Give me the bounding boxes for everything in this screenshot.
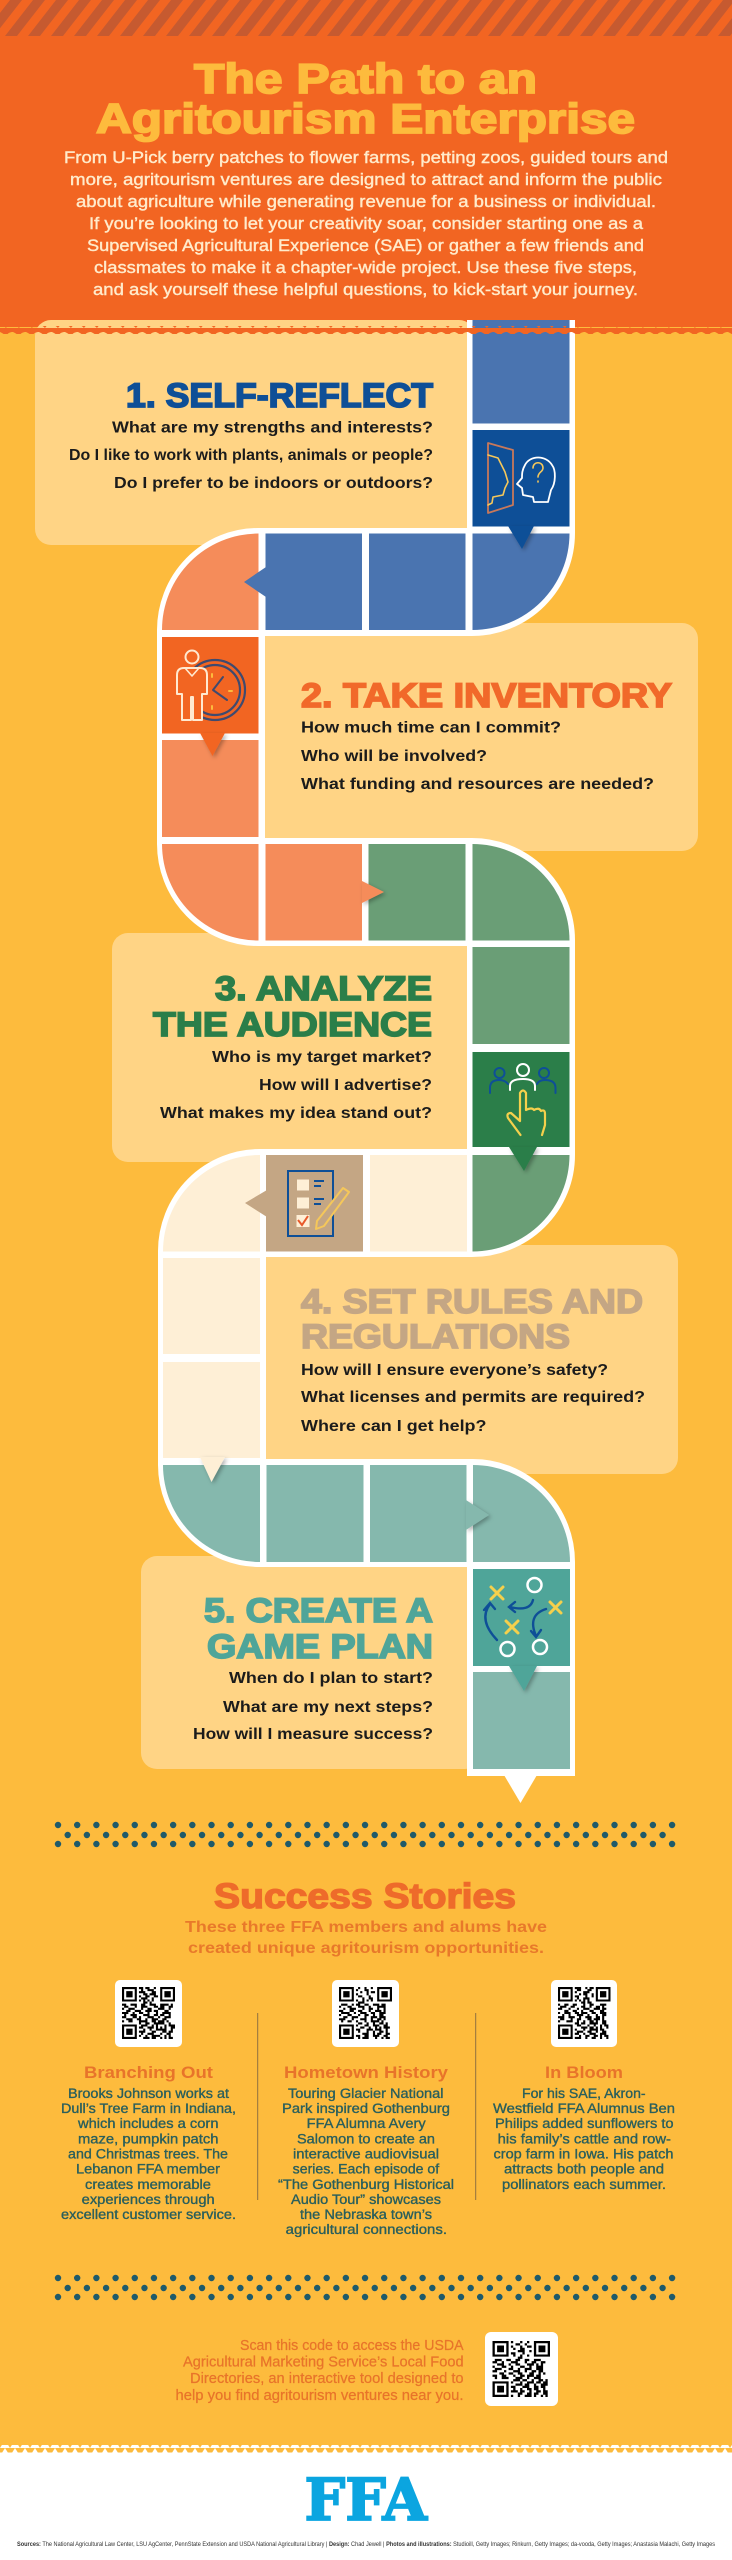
story heading: Hometown History xyxy=(284,2064,449,2082)
heading: create a game plan: GAME PLAN xyxy=(207,1628,433,1666)
FFA logo: FFA xyxy=(304,2466,428,2534)
story text: pollinators each summer. xyxy=(502,2177,666,2192)
story text xyxy=(278,2086,454,2237)
questions: set rules and regulations: Where can I get help? xyxy=(301,1418,486,1435)
story text: FFA Alumna Avery xyxy=(307,2116,426,2131)
footer white area xyxy=(0,2445,732,2560)
story text: For his SAE, Akron- xyxy=(522,2086,646,2101)
heading: analyze the audience: THE AUDIENCE xyxy=(153,1006,432,1044)
questions: create a game plan: What are my next steps? xyxy=(223,1699,433,1716)
local food directories callout: Directories, an interactive tool designed to xyxy=(190,2370,464,2387)
story: in bloom xyxy=(493,2064,675,2192)
QR code: local food directories xyxy=(485,2332,558,2406)
column dividers xyxy=(258,2013,476,2200)
title: The Path to an xyxy=(194,55,537,102)
questions: take inventory xyxy=(301,720,654,793)
heading: analyze the audience xyxy=(153,970,432,1044)
heading: self-reflect: 1. SELF-REFLECT xyxy=(126,377,433,415)
intro paragraph: and ask yourself these helpful questions, to kick-start your journey. xyxy=(93,281,638,299)
step 3 text xyxy=(153,970,432,1122)
story text: maze, pumpkin patch xyxy=(78,2132,218,2146)
success stories subtitle: created unique agritourism opportunities. xyxy=(188,1940,544,1957)
intro paragraph: From U-Pick berry patches to flower farms, petting zoos, guided tours and xyxy=(64,149,668,167)
step 1 text xyxy=(69,377,433,492)
questions: take inventory: How much time can I commit? xyxy=(301,720,561,736)
story text: Audio Tour” showcases xyxy=(291,2192,441,2207)
sawtooth edge of header xyxy=(0,326,732,334)
arrow: teal right xyxy=(466,1500,489,1530)
story text: agricultural connections. xyxy=(286,2222,447,2237)
arrow: cream down xyxy=(200,1457,225,1482)
board squares: step 4 cream xyxy=(163,1155,467,1458)
heading: set rules and regulations: 4. SET RULES AND xyxy=(301,1283,643,1321)
story text xyxy=(61,2086,236,2222)
story text: which includes a corn xyxy=(77,2116,218,2131)
intro paragraph: classmates to make it a chapter-wide project. Use these five steps, xyxy=(94,259,637,277)
success stories heading: Success Stories xyxy=(214,1877,516,1916)
arrow: blue down xyxy=(508,526,534,549)
story text: his family’s cattle and row- xyxy=(498,2132,671,2146)
intro paragraph: Supervised Agricultural Experience (SAE) or gather a few friends and xyxy=(87,237,644,255)
story text: attracts both people and xyxy=(504,2162,664,2177)
questions: set rules and regulations: How will I ensure everyone’s safety? xyxy=(301,1362,608,1379)
step 4 text xyxy=(301,1283,645,1435)
story: hometown history xyxy=(278,2064,454,2237)
heading: create a game plan: 5. CREATE A xyxy=(204,1592,433,1630)
story text: creates memorable xyxy=(85,2177,211,2192)
story text: Touring Glacier National xyxy=(288,2086,444,2101)
questions: analyze the audience: Who is my target market? xyxy=(212,1049,432,1066)
story text: interactive audiovisual xyxy=(293,2146,439,2162)
panel: step 1 background xyxy=(35,320,475,545)
story text: experiences through xyxy=(82,2192,215,2207)
arrow: tan left xyxy=(245,1190,267,1217)
panel: step 3 background xyxy=(112,933,477,1162)
board squares: step 1 blue xyxy=(266,320,570,630)
questions: create a game plan xyxy=(193,1670,433,1743)
QR code: branching out xyxy=(115,1980,182,2047)
story text: Park inspired Gothenburg xyxy=(282,2101,450,2116)
local food directories callout: Agricultural Marketing Service’s Local Food xyxy=(183,2354,464,2371)
questions: self-reflect: What are my strengths and interests? xyxy=(112,420,433,436)
board squares: step 5 teal xyxy=(163,1465,570,1769)
board squares: step 3 green xyxy=(368,844,570,1252)
questions: self-reflect xyxy=(69,420,433,492)
intro paragraph: about agriculture while generating revenue for a business or individual. xyxy=(76,193,656,211)
story text: Dull’s Tree Farm in Indiana, xyxy=(61,2101,236,2116)
success stories subtitle: These three FFA members and alums have xyxy=(185,1919,547,1936)
questions: analyze the audience: What makes my idea stand out? xyxy=(160,1105,432,1122)
QR code: hometown history xyxy=(332,1980,399,2047)
heading: set rules and regulations xyxy=(301,1283,643,1356)
questions: self-reflect: Do I prefer to be indoors or outdoors? xyxy=(114,475,433,492)
arrow: orange down xyxy=(200,733,225,756)
story text: Lebanon FFA member xyxy=(76,2162,221,2177)
local food directories callout: help you find agritourism ventures near you. xyxy=(176,2387,464,2404)
story text: Salomon to create an xyxy=(297,2132,435,2146)
questions: take inventory: Who will be involved? xyxy=(301,748,487,765)
questions: take inventory: What funding and resources are needed? xyxy=(301,776,654,793)
icon: checklist and pencil xyxy=(288,1171,349,1236)
board squares: step 2 orange xyxy=(162,534,362,940)
story text: series. Each episode of xyxy=(293,2162,439,2177)
local food directories callout: Scan this code to access the USDA xyxy=(240,2337,464,2354)
questions: set rules and regulations: What licenses and permits are required? xyxy=(301,1389,645,1406)
icon: game plan X and O xyxy=(484,1578,561,1656)
story heading: In Bloom xyxy=(545,2064,623,2082)
arrow: teal down xyxy=(509,1666,537,1691)
local food directories callout xyxy=(176,2337,464,2404)
success stories subtitle xyxy=(185,1919,547,1957)
intro paragraph xyxy=(64,149,668,299)
intro paragraph: If you’re looking to let your creativity soar, consider starting one as a xyxy=(89,215,644,233)
panel: step 4 background xyxy=(250,1245,678,1474)
story text: “The Gothenburg Historical xyxy=(278,2177,454,2192)
questions: self-reflect: Do I like to work with plants, animals or people? xyxy=(69,447,433,464)
story: branching out xyxy=(61,2064,236,2222)
story text: the Nebraska town’s xyxy=(300,2207,432,2222)
heading: create a game plan xyxy=(204,1592,433,1666)
story text: Brooks Johnson works at xyxy=(68,2086,229,2101)
story text: Westfield FFA Alumnus Ben xyxy=(493,2101,675,2116)
heading: set rules and regulations: REGULATIONS xyxy=(301,1318,570,1356)
dotted divider top xyxy=(58,1825,676,1844)
story text: Philips added sunflowers to xyxy=(495,2116,674,2131)
icon: mirror and head xyxy=(488,443,555,513)
intro paragraph: more, agritourism ventures are designed to attract and inform the public xyxy=(70,171,662,189)
title: Agritourism Enterprise xyxy=(96,95,635,142)
step 2 text xyxy=(301,677,672,793)
story text: and Christmas trees. The xyxy=(68,2146,228,2162)
title xyxy=(96,55,635,142)
arrow: orange right xyxy=(362,881,384,903)
story text xyxy=(493,2086,675,2192)
questions: analyze the audience: How will I advertise? xyxy=(259,1077,432,1094)
step 5 text xyxy=(193,1592,433,1743)
heading: take inventory: 2. TAKE INVENTORY xyxy=(301,677,672,715)
questions: create a game plan: When do I plan to start? xyxy=(229,1670,433,1687)
QR code: in bloom xyxy=(551,1980,617,2047)
story text: excellent customer service. xyxy=(61,2207,236,2222)
arrow: blue left xyxy=(244,567,266,597)
story text: crop farm in Iowa. His patch xyxy=(494,2146,674,2162)
heading: analyze the audience: 3. ANALYZE xyxy=(215,970,432,1008)
questions: create a game plan: How will I measure success? xyxy=(193,1726,433,1743)
questions: analyze the audience xyxy=(160,1049,432,1122)
icon: audience and pointing hand xyxy=(490,1064,556,1135)
icon: person and clock xyxy=(177,650,245,720)
game board path outline xyxy=(211,320,537,1803)
header band xyxy=(0,0,732,327)
panel: step 5 background xyxy=(141,1556,481,1769)
dotted divider bottom xyxy=(58,2278,676,2297)
panel: step 2 background xyxy=(250,623,698,851)
arrow: green down xyxy=(509,1147,537,1171)
questions: set rules and regulations xyxy=(301,1362,645,1435)
story heading: Branching Out xyxy=(84,2064,214,2082)
